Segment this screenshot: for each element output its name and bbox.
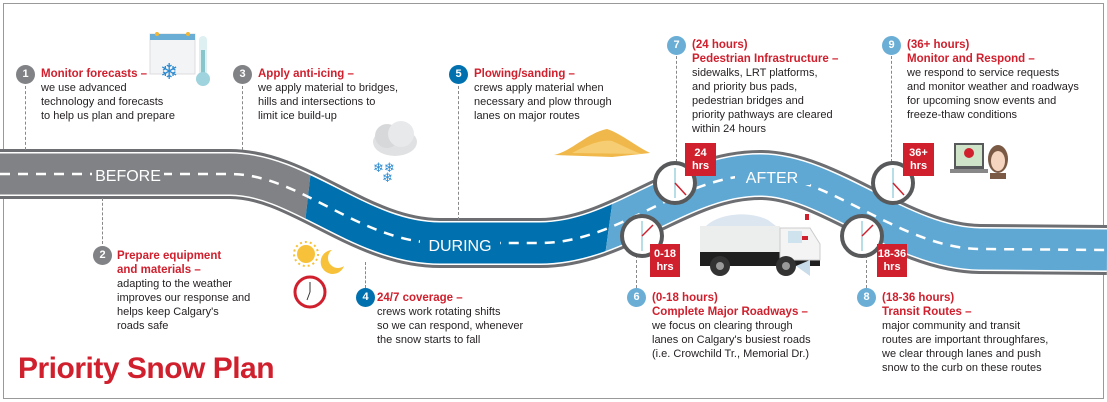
text: 2 prepare: helps keep Calgary's [117, 306, 219, 318]
text: hrs [910, 160, 927, 172]
text: hrs [692, 160, 709, 172]
text: 3 anti-icing: limit ice build-up [258, 110, 337, 122]
text: 7 pedestrian: and priority bus pads, [692, 81, 797, 93]
text: 3 anti-icing [258, 68, 398, 122]
text: 6 major roadways: (0-18 hours) [652, 292, 718, 304]
text: 9 monitor and respond [907, 39, 1079, 121]
road: AFTER [746, 170, 798, 187]
road: BEFORE [95, 168, 161, 185]
text: 4 coverage: the snow starts to fall [377, 334, 480, 346]
text: 2 [99, 249, 106, 261]
text: 4 coverage: 24/7 coverage – [377, 292, 463, 304]
text: 2 prepare: roads safe [117, 320, 168, 332]
text: 9 monitor and respond: (36+ hours) [907, 39, 969, 51]
text: 8 [863, 291, 870, 303]
text: 8 transit: (18-36 hours) [882, 292, 954, 304]
text: 7 pedestrian: (24 hours) [692, 39, 748, 51]
text: 2 prepare: improves our response and [117, 292, 250, 304]
road: DURING [428, 238, 492, 255]
text: 8 transit: routes are important throughfares, [882, 334, 1048, 346]
text: 4 coverage: crews work rotating shifts [377, 306, 500, 318]
text: 7 pedestrian: sidewalks, LRT platforms, [692, 67, 818, 79]
dashed connector lines [25, 56, 892, 288]
text: 9 monitor and respond: and monitor weather and roadways [907, 81, 1079, 93]
text: hrs [656, 261, 674, 273]
text: 1 monitor forecasts: Monitor forecasts – [41, 68, 147, 80]
text: 1 monitor forecasts: to help us plan and prepare [41, 110, 175, 122]
text: 3 [239, 68, 246, 80]
text: 9 monitor and respond: we respond to service requests [907, 67, 1059, 79]
text: 6 major roadways [652, 292, 811, 360]
text: 4 [362, 291, 369, 303]
text: 5 plowing: lanes on major routes [474, 110, 580, 122]
text: 2 prepare [117, 250, 250, 332]
text: 1 [22, 68, 29, 80]
text: 9 monitor and respond: for upcoming snow events and [907, 95, 1056, 107]
text: 6 major roadways: Complete Major Roadways – [652, 306, 808, 318]
text: hrs [883, 261, 901, 273]
text: 2 prepare: Prepare equipment [117, 250, 221, 262]
time tags [650, 143, 934, 277]
icon: cloud with snow: ❄❄ [373, 161, 395, 176]
text: 8 transit: snow to the curb on these routes [882, 362, 1042, 374]
title: Priority Snow Plan [18, 352, 274, 385]
icon: calendar, snowflake, thermometer [150, 32, 210, 86]
text: 2 prepare: and materials – [117, 264, 201, 276]
text: 8 transit: major community and transit [882, 320, 1020, 332]
text: 5 plowing: Plowing/sanding – [474, 68, 575, 80]
icon: snow plow truck [700, 214, 820, 276]
road [0, 149, 1107, 275]
text: 4 coverage: so we can respond, whenever [377, 320, 523, 332]
text: 7 pedestrian [692, 39, 838, 135]
text: 7 [673, 39, 680, 51]
text: 36+ [909, 147, 928, 159]
text: 1 monitor forecasts: technology and forecasts [41, 96, 163, 108]
text: 5 plowing: necessary and plow through [474, 96, 612, 108]
text: 9 monitor and respond: Monitor and Respond – [907, 53, 1035, 65]
text: 9 monitor and respond: freeze-thaw conditions [907, 109, 1017, 121]
icon: cloud with snow [373, 121, 417, 182]
text: 2 prepare: adapting to the weather [117, 278, 232, 290]
text: 3 anti-icing: Apply anti-icing – [258, 68, 354, 80]
text: 3 anti-icing: we apply material to bridges, [258, 82, 398, 94]
text: 9 [888, 39, 895, 51]
text: 7 pedestrian: pedestrian bridges and [692, 95, 804, 107]
text: 18-36 [878, 248, 906, 260]
text: 6 major roadways: (i.e. Crowchild Tr., Memorial Dr.) [652, 348, 809, 360]
text: 5 [455, 68, 462, 80]
text: 7 pedestrian: Pedestrian Infrastructure – [692, 53, 838, 65]
text: 1 monitor forecasts: we use advanced [41, 82, 127, 94]
text: 7 pedestrian: within 24 hours [692, 123, 766, 135]
text: 5 plowing [474, 68, 612, 122]
text: 5 plowing: crews apply material when [474, 82, 604, 94]
icon: sand pile [554, 129, 650, 157]
text: 3 anti-icing: hills and intersections to [258, 96, 375, 108]
text: 4 coverage [377, 292, 523, 346]
text: 6 major roadways: we focus on clearing through [652, 320, 793, 332]
number badges [16, 36, 901, 307]
icon: sun moon alarm clock [293, 241, 344, 308]
text: 7 pedestrian: priority pathways are cleared [692, 109, 833, 121]
text: 8 transit: Transit Routes – [882, 306, 971, 318]
text: 24 [694, 147, 707, 159]
text: 0-18 [654, 248, 676, 260]
text: 8 transit [882, 292, 1048, 374]
icon: laptop map and operator [950, 143, 1008, 179]
text: 6 major roadways: lanes on Calgary's busiest roads [652, 334, 811, 346]
text: 6 [633, 291, 640, 303]
text: 8 transit: we clear through lanes and push [882, 348, 1041, 360]
icon: calendar, snowflake, thermometer: ❄ [160, 60, 178, 85]
text: 1 monitor forecasts [41, 68, 175, 122]
